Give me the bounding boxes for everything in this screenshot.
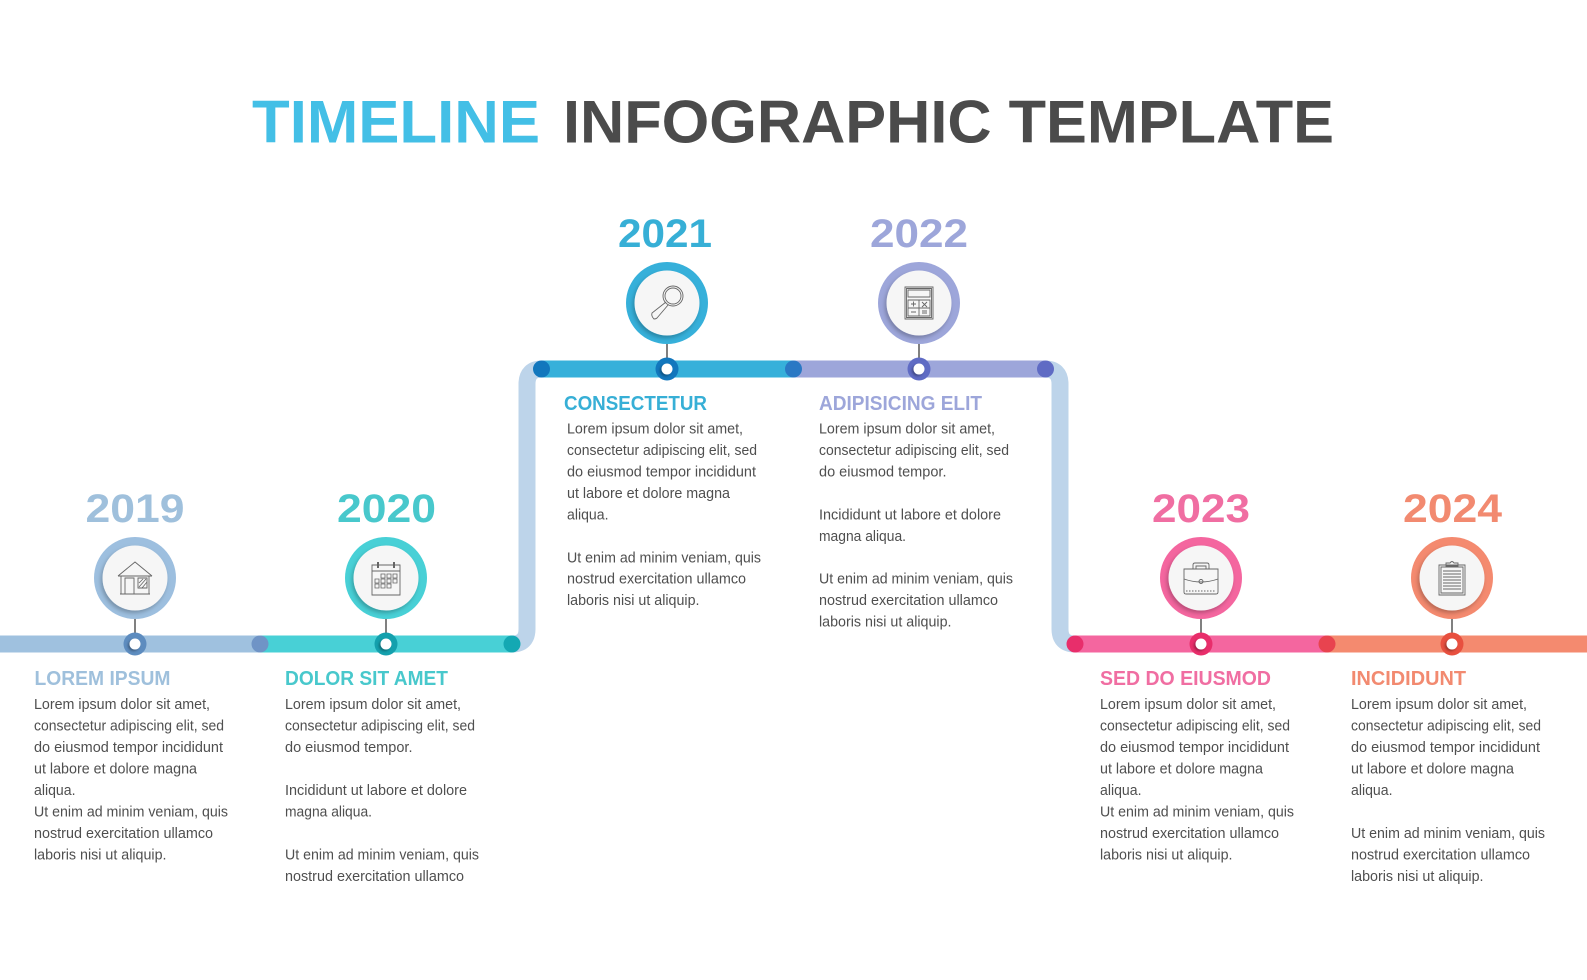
text block: Adipisicing Elit: Incididunt ut labore et dolore [819,507,1001,523]
text block: Adipisicing Elit: laboris nisi ut aliquip. [819,615,952,631]
text block: Consectetur: consectetur adipiscing elit, sed [567,443,757,459]
ring 2020 [345,537,427,619]
connector and node 2023 [1190,618,1212,656]
text block: Dolor Sit Amet: do eiusmod tempor. [285,740,412,756]
text block: Consectetur: ut labore et dolore magna [567,486,731,502]
text block: Dolor Sit Amet: DOLOR SIT AMET [285,668,448,690]
text block: Consectetur: Ut enim ad minim veniam, quis [567,550,761,566]
milestone 2019 [86,487,184,656]
text block: Adipisicing Elit: ADIPISICING ELIT [819,393,982,415]
title: INFOGRAPHIC TEMPLATE [563,88,1334,156]
connector and node 2020 [374,618,398,656]
year 2021: 2021 [618,212,712,256]
text block: Sed Do Eiusmod: nostrud exercitation ullamco [1100,826,1279,842]
text block: Consectetur: do eiusmod tempor incididunt [567,464,756,480]
text block: Consectetur [564,393,761,609]
milestone 2023 [1152,487,1250,656]
text block: Sed Do Eiusmod: do eiusmod tempor incididunt [1100,740,1289,756]
text block: Lorem Ipsum: ut labore et dolore magna [34,761,198,777]
text block: Incididunt: nostrud exercitation ullamco [1351,847,1530,863]
text block: Consectetur: CONSECTETUR [564,393,708,415]
text block: Sed Do Eiusmod [1100,668,1294,863]
text block: Sed Do Eiusmod: consectetur adipiscing elit, sed [1100,718,1290,734]
text block: Lorem Ipsum: consectetur adipiscing elit, sed [34,718,224,734]
text block: Incididunt: aliqua. [1351,783,1392,799]
text block: Lorem Ipsum: Lorem ipsum dolor sit amet, [34,697,210,713]
text block: Lorem Ipsum [34,668,228,863]
text block: Lorem Ipsum: nostrud exercitation ullamco [34,826,213,842]
connector and node 2022 [908,342,930,380]
text block: Dolor Sit Amet: magna aliqua. [285,804,372,820]
text block: Consectetur: nostrud exercitation ullamco [567,572,746,588]
text block: Lorem Ipsum: Ut enim ad minim veniam, quis [34,804,228,820]
text block: Dolor Sit Amet: Lorem ipsum dolor sit amet, [285,697,461,713]
text block: Dolor Sit Amet: Incididunt ut labore et dolore [285,783,467,799]
title: TIMELINE [252,88,540,156]
text block: Dolor Sit Amet [285,668,479,885]
text block: Sed Do Eiusmod: Ut enim ad minim veniam, quis [1100,804,1294,820]
text block: Adipisicing Elit: consectetur adipiscing elit, sed [819,443,1009,459]
connector and node 2019 [124,618,146,656]
text block: Incididunt [1351,668,1545,885]
text block: Sed Do Eiusmod: ut labore et dolore magna [1100,761,1264,777]
ring 2019 [94,537,176,619]
icon: briefcase [1184,563,1218,594]
milestone 2024 [1403,487,1503,656]
milestone 2022 [870,212,968,380]
icon: clipboard [1439,562,1465,595]
year 2019: 2019 [86,487,184,531]
text block: Dolor Sit Amet: consectetur adipiscing elit, sed [285,718,475,734]
text block: Incididunt: laboris nisi ut aliquip. [1351,869,1484,885]
text block: Incididunt: consectetur adipiscing elit, sed [1351,718,1541,734]
connector and node 2024 [1440,618,1464,656]
text block: Adipisicing Elit: Ut enim ad minim veniam, quis [819,572,1013,588]
text block: Adipisicing Elit: nostrud exercitation ullamco [819,593,998,609]
text block: Sed Do Eiusmod: SED DO EIUSMOD [1100,668,1271,690]
timeline track [0,360,1587,652]
text block: Lorem Ipsum: laboris nisi ut aliquip. [34,847,166,863]
text block: Dolor Sit Amet: Ut enim ad minim veniam, quis [285,847,479,863]
milestone 2020 [337,487,436,656]
text block: Lorem Ipsum: LOREM IPSUM [34,668,170,690]
ring 2024 [1411,537,1493,619]
text block: Adipisicing Elit: Lorem ipsum dolor sit amet, [819,422,995,438]
text block: Adipisicing Elit: do eiusmod tempor. [819,464,946,480]
text block: Lorem Ipsum: do eiusmod tempor incididunt [34,740,223,756]
text block: Sed Do Eiusmod: aliqua. [1100,783,1142,799]
ring 2021 [626,262,708,344]
text block: Lorem Ipsum: aliqua. [34,783,76,799]
connector and node 2021 [656,342,678,380]
text block: Dolor Sit Amet: nostrud exercitation ullamco [285,869,464,885]
text block: Incididunt: INCIDIDUNT [1351,668,1466,690]
text block: Incididunt: Lorem ipsum dolor sit amet, [1351,697,1527,713]
ring 2023 [1160,537,1242,619]
year 2022: 2022 [870,212,968,256]
text block: Consectetur: laboris nisi ut aliquip. [567,593,700,609]
text block: Adipisicing Elit: magna aliqua. [819,529,906,545]
text block: Adipisicing Elit [819,393,1013,631]
icon: magnifying glass [652,286,683,319]
icon: calculator [905,287,933,319]
icon: house [118,562,152,594]
icon: calendar [372,562,400,595]
title [252,88,1334,156]
text block: Incididunt: do eiusmod tempor incididunt [1351,740,1540,756]
milestone 2021 [618,212,712,380]
ring 2022 [878,262,960,344]
text block: Consectetur: Lorem ipsum dolor sit amet, [567,422,743,438]
year 2024: 2024 [1403,487,1503,531]
text block: Sed Do Eiusmod: Lorem ipsum dolor sit amet, [1100,697,1276,713]
year 2020: 2020 [337,487,436,531]
text block: Consectetur: aliqua. [567,507,608,523]
text block: Incididunt: Ut enim ad minim veniam, quis [1351,826,1545,842]
year 2023: 2023 [1152,487,1250,531]
text block: Sed Do Eiusmod: laboris nisi ut aliquip. [1100,847,1232,863]
text block: Incididunt: ut labore et dolore magna [1351,761,1515,777]
